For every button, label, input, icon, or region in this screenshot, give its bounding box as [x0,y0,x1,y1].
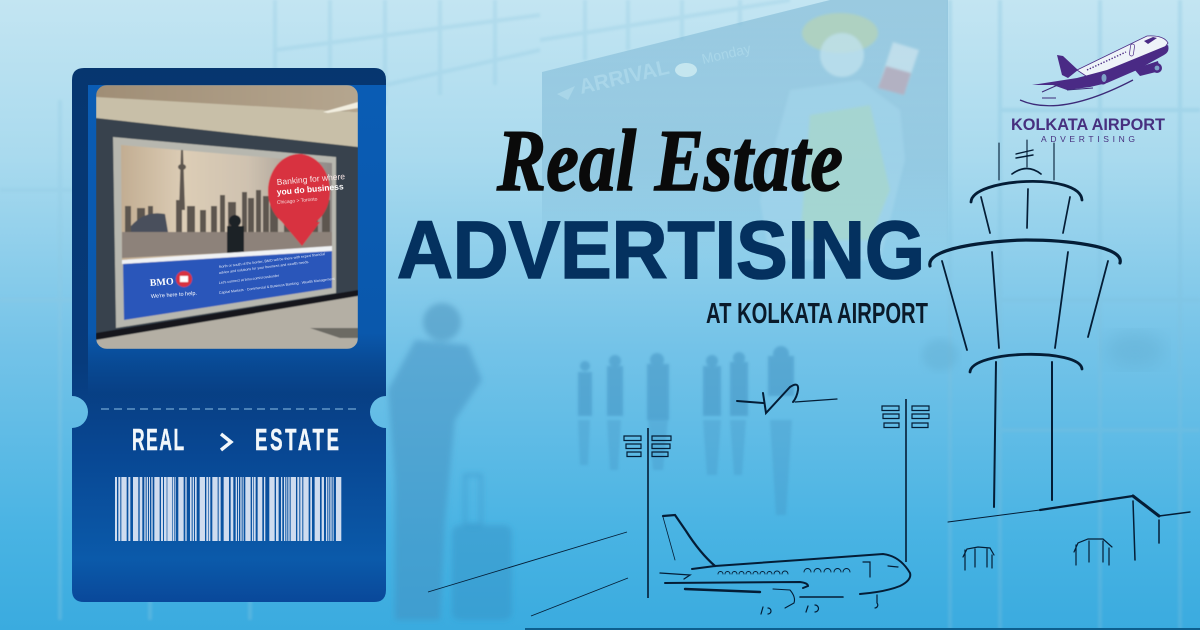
ad photo: lit billboard in terminal [96,85,358,349]
city skyline [125,150,330,232]
red pin callout text: Banking for where [276,171,346,187]
red pin callout text: you do business [276,181,344,197]
line art: left light pole [624,428,671,598]
logo: Kolkata Airport Advertising [1011,36,1168,144]
ad copy: advice and solutions for your business and wealth needs. [219,260,310,275]
arrival board: Monday [700,40,752,67]
line art: runway lines [428,532,628,616]
ad copy: North or south of the border, BMO will be there with expert financial [219,252,325,269]
line art: small plane in the sky [737,385,837,413]
barcode [115,477,341,541]
bottom edge line [525,628,1200,630]
red pin callout text: Chicago > Toronto [277,196,318,206]
perforation line [101,408,360,410]
arrival board [542,0,948,260]
title: ADVERTISING: ADVERTISING [397,205,925,296]
red pin callout text [276,174,345,204]
ad copy [219,252,335,295]
boarding pass ticket [72,68,386,602]
line art: right light pole [882,399,929,562]
title: Real Estate: Real Estate [496,113,843,210]
man on phone with suitcase [388,303,512,620]
BMO logo text: BMO [149,276,174,289]
line art: parked airplane [660,515,910,614]
logo: Kolkata Airport Advertising: KOLKATA AIRPORT [1011,116,1165,134]
ad copy: Let's connect at bmo.com/crossborder [219,274,280,285]
line art: terminal building [948,496,1190,570]
ticket route text [132,423,339,457]
ad copy: Capital Markets · Commercial & Business Banking · Wealth Management [219,277,335,295]
traveller with hat and passport [760,13,919,260]
ticket route text: ESTATE [255,423,339,457]
BMO logo text: We're here to help. [151,291,198,300]
line art: control tower [930,140,1120,507]
ticket route text: REAL [132,423,184,457]
logo: Kolkata Airport Advertising: ADVERTISING [1041,134,1135,144]
silhouettes of passengers [578,346,794,515]
arrival board: ARRIVAL [577,56,672,99]
icon: purple airplane [1020,36,1168,106]
BMO logo text [150,278,196,298]
subtitle: AT KOLKATA AIRPORT [706,298,928,330]
